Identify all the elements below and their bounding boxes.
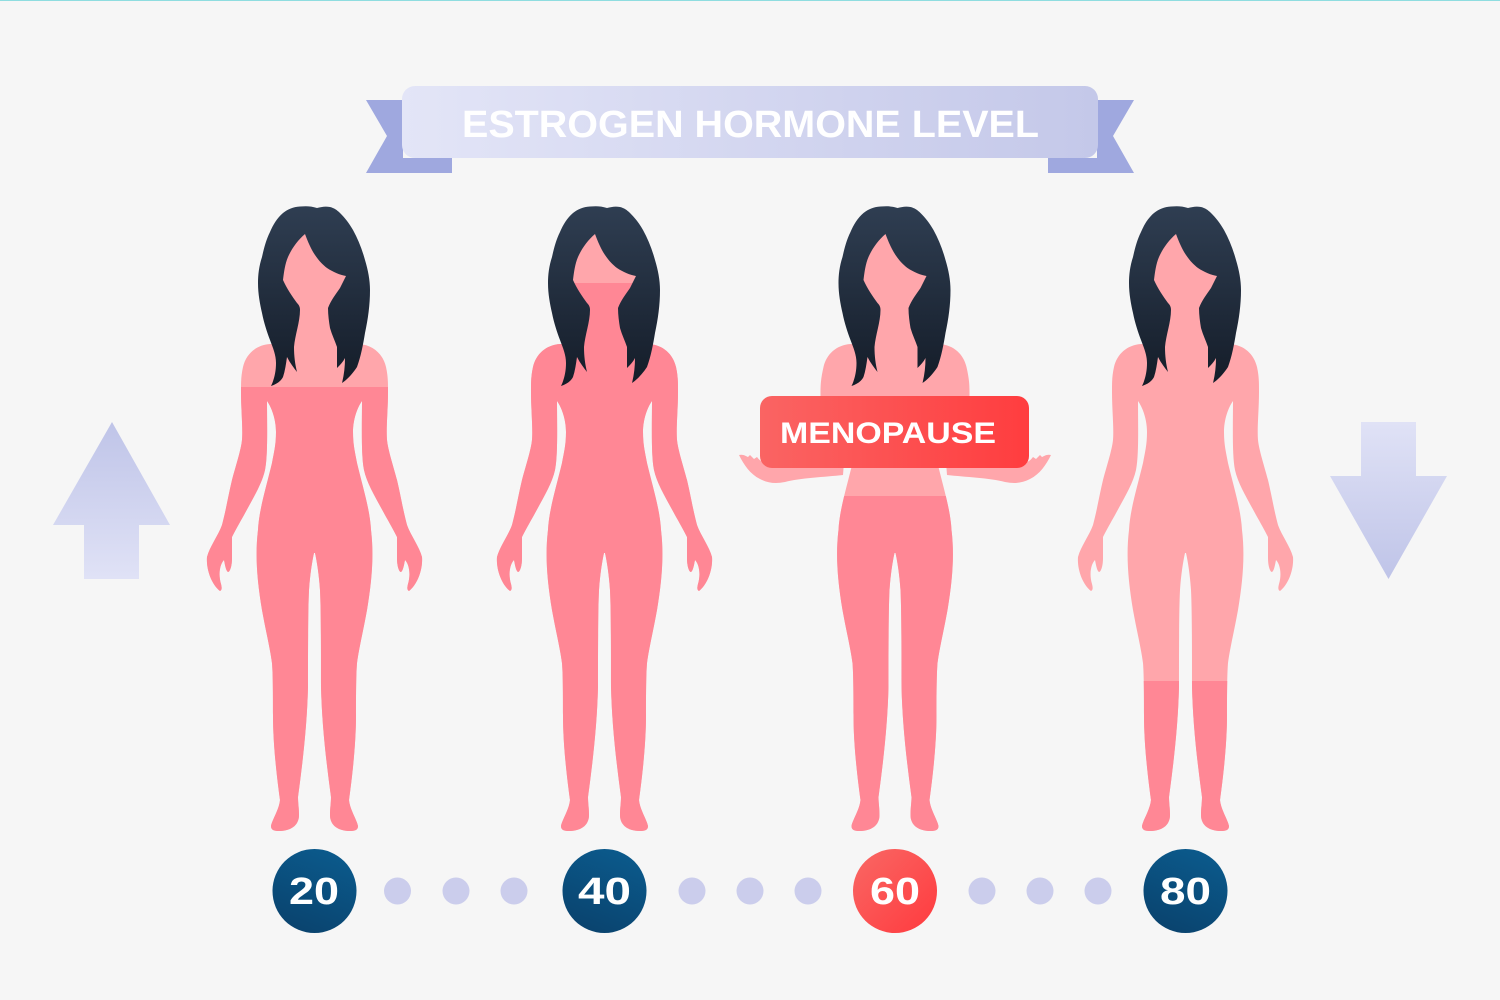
icon: right hand holding label — [946, 455, 1051, 483]
ribbon right tail — [1048, 100, 1134, 173]
age badge 20 — [272, 849, 356, 933]
age badge 40 — [562, 849, 646, 933]
age badge 20: 20 — [289, 871, 339, 913]
age badge 80 — [1144, 849, 1228, 933]
ribbon left tail — [366, 100, 452, 173]
arrow down — [1330, 422, 1447, 579]
figure: age 20 — [207, 206, 422, 831]
age badge 60 — [853, 849, 937, 933]
age badge 80: 80 — [1160, 871, 1211, 913]
figure: age 40 — [497, 206, 712, 831]
age badge 60: 60 — [870, 871, 920, 913]
arrow up — [53, 422, 170, 579]
title ribbon — [366, 86, 1134, 173]
icon: left hand holding label — [739, 455, 844, 483]
menopause label — [760, 396, 1029, 468]
figure: age 60 — [820, 206, 970, 831]
top edge line — [0, 0, 1500, 1]
age badge 40: 40 — [578, 871, 631, 913]
menopause label: MENOPAUSE — [780, 417, 996, 450]
title: ESTROGEN HORMONE LEVEL — [462, 104, 1039, 146]
figure: age 80 — [1078, 206, 1293, 831]
ribbon banner — [402, 86, 1098, 158]
timeline dots — [384, 878, 1112, 904]
